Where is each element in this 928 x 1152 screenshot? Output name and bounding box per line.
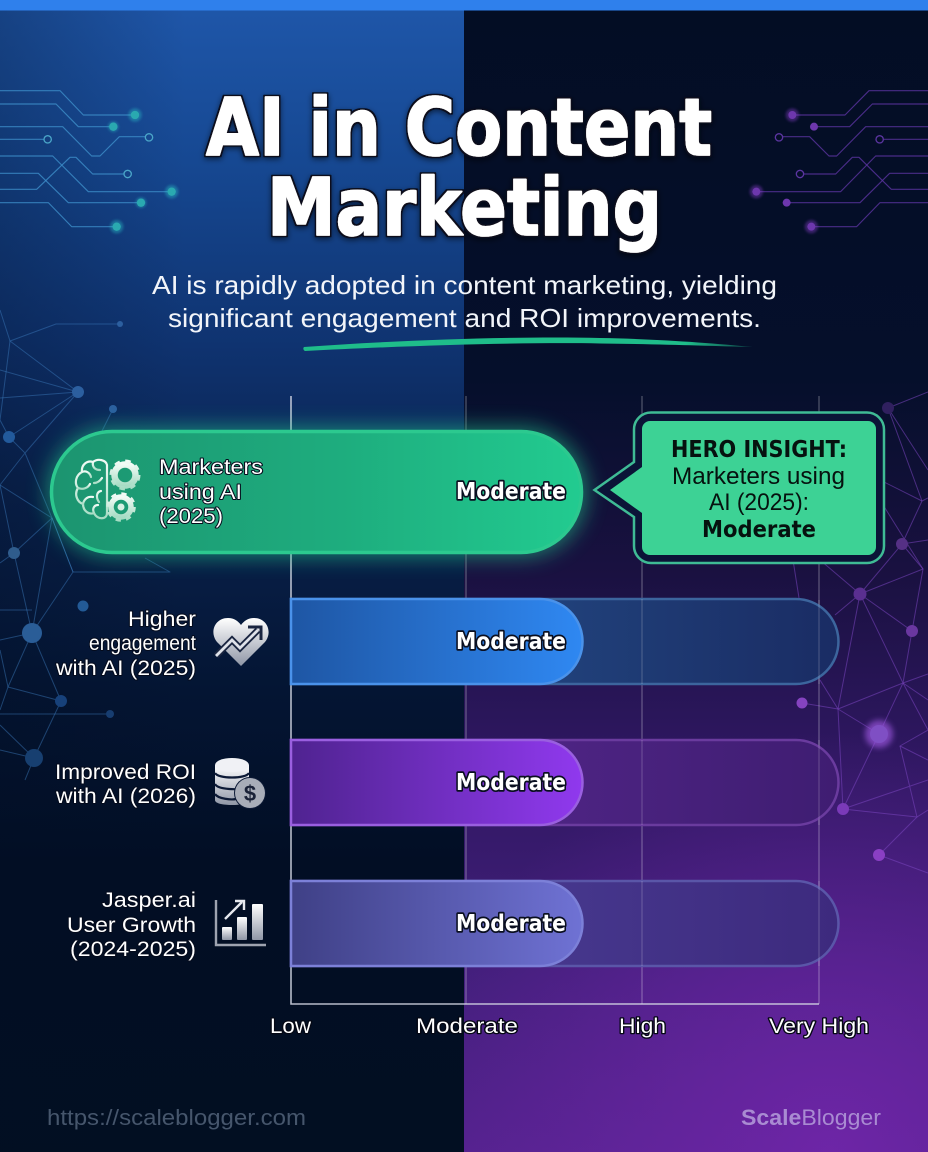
label: (2025) <box>159 504 223 528</box>
hero bar: marketers using AI <box>52 432 582 552</box>
bar fill <box>291 881 582 966</box>
label: Jasper user growth: (2024-2025) <box>70 937 196 961</box>
value: Moderate <box>456 911 566 937</box>
hero bar glow <box>48 428 586 556</box>
track <box>291 881 838 966</box>
top accent bar <box>0 0 928 10</box>
label: higher engagement <box>55 607 196 680</box>
label: Jasper user growth: Jasper.ai <box>102 888 196 912</box>
label: Jasper user growth: User Growth <box>67 913 196 937</box>
label: improved ROI: Improved ROI <box>55 760 196 784</box>
title: Marketing <box>267 162 662 254</box>
callout: hero insight: Moderate <box>702 515 816 543</box>
value: Moderate <box>456 629 566 655</box>
label: Marketers <box>159 455 263 479</box>
value: Moderate <box>456 770 566 796</box>
label: higher engagement: engagement <box>89 631 196 655</box>
icon: brain and gears <box>76 460 138 520</box>
track <box>291 740 838 825</box>
row: improved ROI bar <box>291 740 838 825</box>
background: right purple half <box>464 0 928 1152</box>
row: Jasper user growth bar <box>291 881 838 966</box>
subtitle: AI is rapidly adopted in content marketing, yielding <box>152 270 777 300</box>
grid overlay <box>642 599 819 684</box>
label <box>159 455 263 528</box>
title <box>206 82 712 254</box>
gear top <box>112 462 138 488</box>
label: Jasper user growth <box>67 888 196 961</box>
axis labels: Very High <box>769 1014 869 1038</box>
icon: bar chart with arrow <box>216 900 266 945</box>
label: improved ROI <box>55 760 196 808</box>
circuit lines left <box>0 91 178 233</box>
gear bottom <box>108 494 134 520</box>
axis labels <box>270 1014 869 1038</box>
bar fill <box>291 740 582 825</box>
label: using AI <box>159 480 242 504</box>
circuit lines right <box>750 91 928 233</box>
chart gridlines and axes <box>291 396 819 1004</box>
neural network left <box>0 310 170 780</box>
axis labels: Moderate <box>416 1014 518 1038</box>
track <box>291 599 838 684</box>
title: AI in Content <box>206 82 712 174</box>
axis labels: Low <box>270 1014 311 1038</box>
background: left blue half <box>0 0 464 1152</box>
icon: coin stack with dollar: $ <box>244 781 256 806</box>
label: improved ROI: with AI (2026) <box>55 784 196 808</box>
grid overlay <box>642 881 819 966</box>
callout: hero insight <box>594 412 884 563</box>
callout: hero insight: AI (2025): <box>709 489 809 516</box>
bar fill <box>291 599 582 684</box>
value: Moderate <box>456 479 566 505</box>
icon: coin stack with dollar <box>215 758 266 809</box>
subtitle: significant engagement and ROI improvements. <box>168 303 761 333</box>
footer url: https://scaleblogger.com <box>47 1105 306 1130</box>
label: higher engagement: with AI (2025) <box>55 656 196 680</box>
footer brand: ScaleBlogger <box>741 1105 881 1130</box>
icon: heart with rising arrow <box>213 618 269 666</box>
axis labels: High <box>619 1014 666 1038</box>
neural network right <box>793 392 928 873</box>
callout: hero insight: Marketers using <box>672 463 845 490</box>
row: higher engagement bar <box>291 599 838 684</box>
label: higher engagement: Higher <box>128 607 196 631</box>
callout: hero insight: HERO INSIGHT: <box>671 435 847 463</box>
subtitle <box>152 270 777 333</box>
grid overlay <box>642 740 819 825</box>
subtitle underline <box>303 337 753 351</box>
